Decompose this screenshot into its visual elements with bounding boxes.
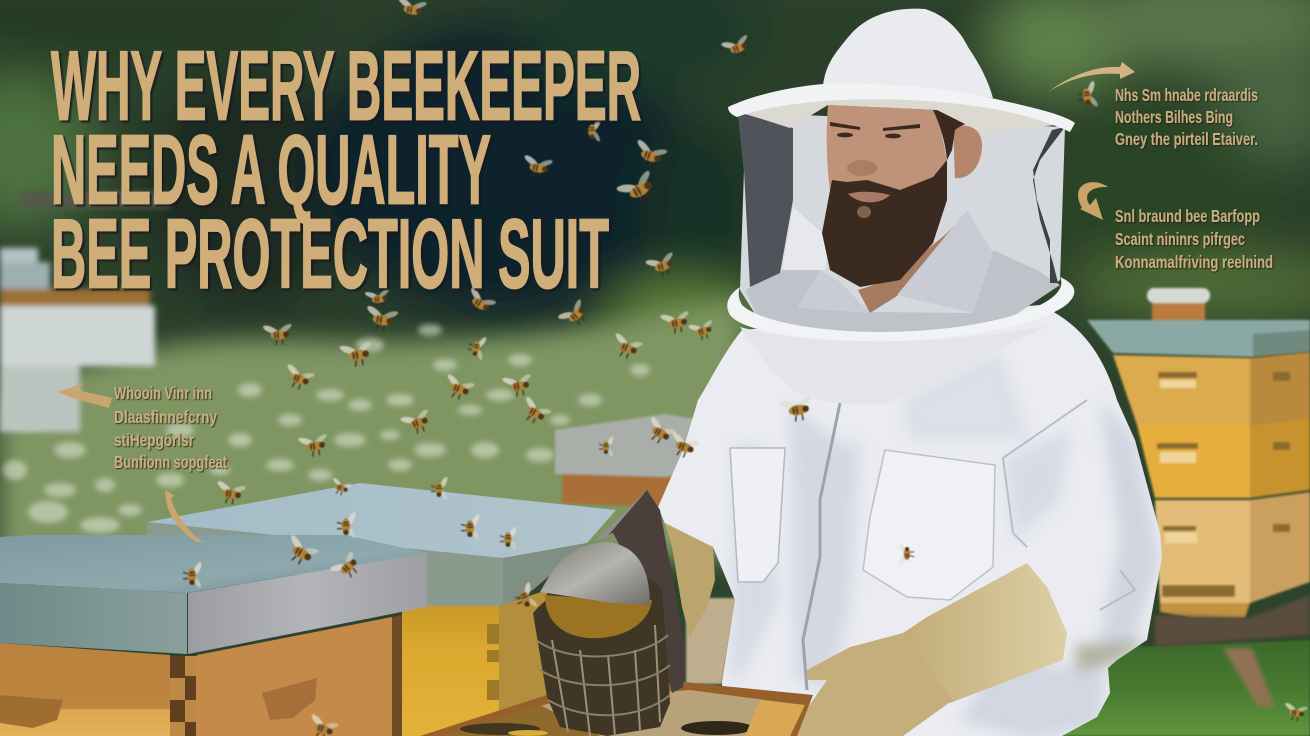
right glove hand [797, 633, 953, 736]
arrow: bottom left [165, 490, 203, 542]
suit [650, 300, 1170, 736]
hive stand [1155, 595, 1310, 707]
gold bowl [545, 595, 652, 638]
beard [822, 160, 947, 287]
eyes and brows [830, 122, 920, 138]
bottom veil hoop [727, 277, 1074, 341]
handle slots [262, 678, 317, 720]
veil lower [745, 250, 1060, 335]
neck [858, 213, 973, 313]
mesh right dark [1033, 127, 1065, 283]
ear [953, 126, 982, 178]
clay pot [1147, 288, 1210, 325]
callout: left: Whooin Vinr inn [114, 383, 212, 403]
right hive stack [1060, 288, 1310, 736]
zipper [803, 403, 840, 690]
shirt back panel [782, 207, 830, 270]
nose shadow [847, 160, 877, 176]
smoker [533, 490, 685, 736]
hat brim [728, 84, 1075, 132]
lid left face [0, 583, 187, 654]
title: NEEDS A QUALITY [51, 114, 491, 224]
title [51, 30, 641, 308]
yellow box [402, 606, 499, 736]
back hive center [555, 414, 737, 684]
callout: top right [1115, 85, 1258, 149]
left glove [665, 523, 715, 637]
front hive [0, 535, 427, 736]
brood frame [420, 682, 813, 736]
hat crown [823, 9, 993, 98]
callout: middle right: Snl braund bee Barfopp [1115, 206, 1260, 226]
mesh left dark [738, 112, 793, 287]
grass [1060, 640, 1310, 736]
title: BEE PROTECTION SUIT [51, 198, 609, 308]
cage [533, 573, 670, 736]
cowl collar [740, 325, 1050, 404]
meadow of white flowers [0, 300, 740, 560]
box left face [0, 643, 170, 736]
pocket right [863, 450, 995, 600]
face [827, 105, 947, 225]
arrow: curl right [1078, 182, 1108, 220]
lid top [147, 483, 616, 558]
beekeeper [650, 9, 1170, 736]
box right face [197, 617, 392, 736]
hive lid [1087, 320, 1310, 357]
arrow: left [58, 383, 112, 408]
callout: left: Bunfionn sopgfeat [114, 452, 227, 472]
callout: middle right [1115, 206, 1273, 272]
lid top [0, 535, 427, 593]
right glove gauntlet [903, 563, 1067, 703]
hair [933, 110, 987, 160]
box corner joint [170, 656, 197, 736]
middle hive [147, 483, 616, 736]
hive boxes [1113, 352, 1310, 618]
callout: left: stiHepgőrlsr [114, 430, 194, 450]
lid front [147, 522, 503, 608]
callout: middle right: Scaint nininrs pifrgec [1115, 229, 1245, 249]
bellows [593, 490, 685, 693]
lid side [503, 543, 587, 608]
callout: top right: Gney the pirteil Etaiver. [1115, 129, 1258, 149]
dome [540, 542, 650, 605]
background hives left [0, 192, 170, 432]
veil interior [738, 112, 1065, 335]
sleeve seams [1003, 400, 1135, 610]
callout: left: Dlaasfinnefcrny [114, 407, 217, 427]
shirt collar [797, 210, 993, 313]
pocket left [730, 448, 785, 582]
hat underside [743, 98, 1055, 133]
callout: top right: Nothers Bilhes Bing [1115, 107, 1233, 127]
arrow: top right [1048, 62, 1135, 92]
callout: left [114, 383, 227, 472]
lid right face [188, 553, 427, 654]
lips and chin [848, 192, 890, 202]
infographic scene: WHY EVERY BEEKEEPER [51, 30, 641, 140]
